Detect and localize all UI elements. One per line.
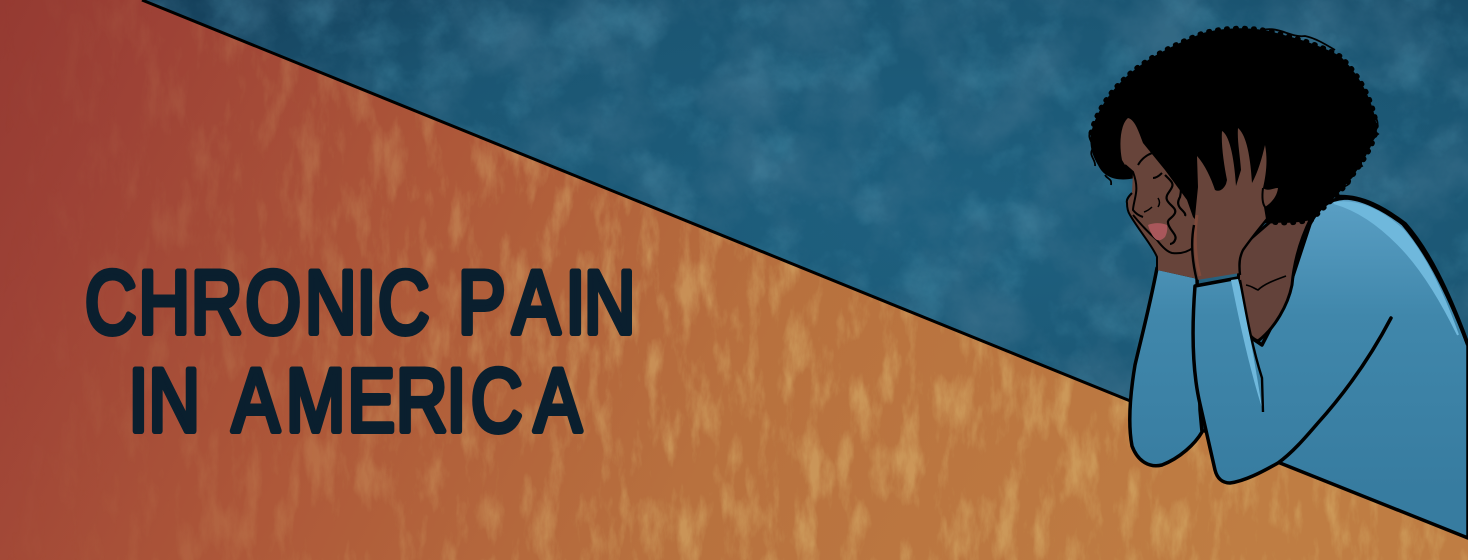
near arm outline — [1193, 278, 1391, 483]
title: CHRONIC PAIN — [85, 253, 635, 353]
sweater shoulder highlight — [1334, 202, 1458, 335]
hair — [1089, 28, 1378, 230]
face curls — [1165, 175, 1185, 244]
loose curls — [1089, 29, 1378, 190]
hand shadow edge — [1195, 215, 1200, 276]
shoulder outline — [1336, 197, 1468, 345]
far arm sleeve — [1130, 268, 1202, 466]
wrist edge — [1192, 219, 1267, 281]
near hand — [1192, 128, 1278, 280]
near arm sleeve — [1193, 279, 1388, 483]
illustration: woman holding her head — [1089, 28, 1468, 538]
neck — [1238, 218, 1311, 341]
cuff highlight — [1231, 279, 1262, 408]
title: IN AMERICA — [128, 351, 582, 451]
far hand and face — [1120, 118, 1200, 279]
thumb line — [1262, 188, 1267, 219]
lips — [1148, 223, 1167, 240]
torso and sweater — [1240, 198, 1468, 538]
inner arm crease — [1240, 280, 1263, 412]
face and palm outline — [1125, 165, 1194, 270]
neck crease — [1246, 276, 1286, 290]
eyebrow and eye — [1138, 152, 1162, 178]
nose and mouth — [1144, 198, 1160, 212]
title — [85, 253, 635, 451]
